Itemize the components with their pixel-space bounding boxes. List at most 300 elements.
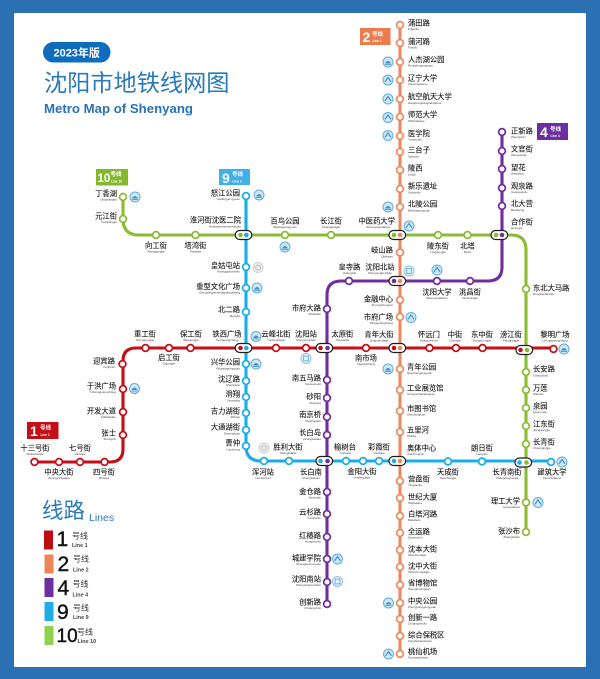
station: 云杉路: Yunshanlu	[307, 516, 321, 520]
station: 天成街: 天成街	[437, 468, 459, 476]
station: 皇寺路: Huangsilu	[343, 271, 357, 275]
station: 长白南: Changbainan	[302, 476, 320, 480]
station: 南市场: Nanshichang	[357, 362, 375, 366]
station: 长青南街: 长青南街	[492, 468, 522, 476]
legend: line 1: Line 1	[72, 543, 88, 549]
station: 工业展览馆: Gongyezhanlanguan	[407, 392, 435, 396]
legend: line 2: 号线	[73, 554, 89, 564]
station: 蒲田路: Putianlu	[408, 27, 419, 31]
station: 师范大学	[397, 110, 437, 123]
station: 理工大学: Ligongdaxue	[503, 505, 520, 509]
station: 长青南街: Changqingnanjie	[496, 476, 519, 480]
station: 全运路: 全运路	[408, 527, 431, 536]
legend: line 10: 号线	[77, 626, 93, 636]
station: 张士: Zhangshi	[104, 437, 116, 441]
station: 张士	[101, 428, 126, 441]
station: 太原街: Taiyuanjie	[336, 338, 350, 342]
station: 于洪广场	[87, 382, 126, 394]
station: 南京桥	[299, 410, 330, 423]
station: 东北大马路: Dongbeidamalu	[533, 292, 554, 296]
station: 观泉路: 观泉路	[511, 182, 534, 190]
station: 沈辽路	[218, 374, 249, 387]
interchange: 长青南街	[515, 458, 532, 467]
station: 吉力湖街: 吉力湖街	[211, 406, 240, 416]
station: 师范大学: Shifandaxue	[408, 119, 425, 123]
station: 建筑大学	[537, 459, 567, 480]
station: 正新路: Zhengxinlu	[511, 135, 526, 139]
station: 北塔: 北塔	[460, 242, 475, 250]
station: 洮昌街: Taochangjie	[462, 296, 478, 300]
legend: line 1: 号线	[72, 530, 88, 540]
icon: 中央公园	[384, 598, 394, 608]
station: 省博物馆: Shengbowuguan	[408, 587, 431, 591]
station: 迎宾路	[93, 356, 126, 369]
icon: 医学院	[383, 130, 393, 140]
station: 沈阳大学: Shenyangdaxue	[426, 296, 448, 300]
station: 元江街: Yuanjiangjie	[101, 220, 117, 224]
station: 世纪大厦	[397, 492, 437, 505]
icon: 铁西广场	[251, 332, 261, 342]
legend: line 4: 号线	[72, 578, 88, 588]
icon: 沈阳大学	[432, 265, 442, 275]
legend: line 10	[44, 626, 96, 647]
station: 长安路: Chang'anlu	[533, 374, 548, 378]
icon: 沈阳北站	[404, 266, 414, 276]
station: 泉园: 泉园	[533, 402, 548, 410]
station: 滂江街: 滂江街	[500, 330, 522, 339]
station: 大通湖街: Datonghujie	[224, 432, 240, 436]
legend: line 10: Line 10	[78, 639, 96, 645]
station: 保工街	[180, 330, 202, 351]
station: 七号街: Qihaojie	[74, 452, 86, 456]
station: 开发大道: 开发大道	[87, 406, 117, 416]
line 4 badge: 号线	[550, 125, 562, 133]
station: 青年大街: Qingniandajie	[370, 338, 388, 342]
station: 三台子: Santaizi	[408, 154, 419, 158]
station: 张沙布: 张沙布	[498, 526, 520, 536]
icon: 城建学院	[332, 554, 342, 564]
station: 怒江公园: Nujianggongyuan	[217, 197, 240, 201]
station: 黎明广场	[540, 330, 570, 352]
station: 东中街	[471, 330, 493, 351]
station: 长白岛: 长白岛	[299, 428, 321, 437]
station: 蒲河路: Puhelu	[408, 46, 418, 50]
station: 人杰湖公园: 人杰湖公园	[408, 55, 444, 64]
station: 胜利大街	[273, 442, 303, 464]
line 1 route	[34, 348, 553, 462]
station: 桃仙机场: 桃仙机场	[408, 647, 437, 656]
station: 创新一路: Chuangxinyilu	[408, 622, 427, 626]
line 4 route	[327, 132, 502, 604]
station: 万莲: 万莲	[533, 384, 548, 392]
station: 合作街: Hezuojie	[511, 226, 523, 230]
station: 张沙布	[498, 526, 529, 539]
station: 沈阳站: Shenyangzhan	[296, 338, 316, 342]
station: 重型文化广场	[196, 282, 249, 294]
station: 天成街: Tianchengjie	[440, 476, 457, 480]
station: 大通湖街	[211, 422, 249, 436]
station: 兴华公园: 兴华公园	[211, 358, 240, 366]
legend	[42, 499, 114, 647]
station: 全运路: Quanyunlu	[408, 536, 423, 540]
station: 正新路: 正新路	[511, 126, 534, 136]
station: 重工街	[134, 330, 156, 351]
station: 滑翔	[225, 390, 249, 402]
station: 怀远门: Huaiyuanmen	[420, 338, 439, 342]
icon: 建筑大学	[557, 457, 567, 467]
line 10 badge: 号线	[110, 170, 122, 178]
station: 市府广场: Shifuguangchang	[370, 321, 393, 325]
station: 铁西广场: Tiexiguangchang	[216, 338, 239, 342]
subtitle: Metro Map of Shenyang	[44, 101, 193, 116]
station: 曹仲	[225, 438, 249, 452]
station: 市府广场: 市府广场	[364, 312, 393, 322]
station: 金阳大街: 金阳大街	[347, 467, 377, 476]
station: 铁西广场: 铁西广场	[212, 330, 242, 338]
line 9 badge: Line 9	[232, 180, 242, 184]
station: 医学院: 医学院	[408, 129, 431, 138]
station: 塔湾街: 塔湾街	[185, 241, 206, 250]
legend: line 2: 2	[58, 553, 69, 576]
station: 百鸟公园: 百鸟公园	[270, 216, 300, 226]
icon: 重型文化广场	[252, 283, 262, 293]
station: 中医药大学: Zhongyiyaodaxue	[366, 225, 390, 229]
station: 泉园	[523, 402, 548, 414]
station: 北陵公园: 北陵公园	[408, 200, 437, 208]
line 9 route	[246, 197, 551, 461]
station: 重工街: Zhonggongjie	[136, 338, 154, 342]
station: 沈阳站: 沈阳站	[295, 330, 317, 338]
station: 北塔: Beita	[464, 250, 471, 254]
station: 工业展览馆: 工业展览馆	[407, 384, 443, 392]
station: 榆树台	[334, 442, 356, 464]
station: 市府大路: Shifudalu	[308, 312, 321, 316]
station: 南京桥: Nanjingqiao	[305, 419, 321, 423]
station: 望花	[499, 163, 526, 176]
station: 综合保税区: Zonghebaoshuiqu	[408, 639, 432, 643]
station: 市府广场	[364, 312, 403, 325]
interchange: 沈阳北站	[389, 276, 406, 286]
station: 北二路	[218, 305, 249, 318]
station: 北大营: Beidaying	[511, 208, 525, 212]
line 1 badge	[27, 422, 58, 439]
station: 沈中大街: 沈中大街	[408, 562, 437, 570]
station: 红椿路	[299, 531, 330, 544]
station: 蒲河路	[397, 37, 431, 50]
station: 黎明广场: Limingguangchang	[542, 338, 568, 342]
interchange: 青年大街	[389, 344, 406, 352]
icon: 百鸟公园	[280, 242, 290, 252]
station: 皇寺路	[339, 262, 361, 284]
legend: line 9: Line 9	[73, 615, 89, 621]
legend: line 1	[44, 528, 88, 551]
station: 红椿路: 红椿路	[299, 531, 322, 540]
station: 丁香湖: Dingxianghu	[100, 198, 117, 202]
line 1 badge: 1	[30, 423, 38, 439]
station: 南京桥: 南京桥	[299, 410, 322, 419]
station: 中街: Zhongjie	[449, 338, 461, 342]
station: 东北大马路	[523, 284, 570, 296]
station: 沈中大街	[397, 562, 437, 574]
station: 望花: 望花	[511, 163, 526, 172]
station: 云峰北街: Yunfengbeijie	[267, 338, 285, 342]
station: 蒲河路: 蒲河路	[408, 37, 431, 46]
station: 胜利大街: Shenglidajie	[280, 451, 296, 455]
station: 沈本大街: 沈本大街	[408, 544, 437, 554]
station: 创新一路: 创新一路	[408, 613, 438, 622]
legend: line 4: 4	[58, 577, 70, 600]
station: 航空航天大学: 航空航天大学	[408, 92, 452, 101]
line 9 badge	[219, 169, 250, 186]
station: 十三号街: Shisanhaojie	[26, 452, 44, 456]
line 2 badge: Line 2	[372, 39, 382, 43]
station: 云峰北街: 云峰北街	[261, 330, 291, 338]
interchange: 中医药大学	[389, 230, 406, 240]
station: 沈本大街	[397, 544, 437, 557]
station: 观泉路	[499, 182, 534, 194]
station: 奥体中心: Aotizhongxin	[407, 452, 425, 456]
station: 云杉路: 云杉路	[299, 508, 322, 516]
station: 沈辽路: 沈辽路	[218, 374, 241, 384]
line 1 stations	[20, 330, 570, 480]
station: 东中街: 东中街	[471, 330, 493, 339]
station: 创新路	[299, 598, 330, 610]
station: 长青街: Changqingjie	[533, 446, 551, 450]
station: 建筑大学: 建筑大学	[537, 468, 567, 476]
station: 淮河街沈医二院: Huaihejieshenyierbyuan	[209, 224, 241, 228]
line 9 stations	[196, 188, 567, 480]
station: 塔湾街	[185, 232, 206, 254]
station: 理工大学	[491, 496, 529, 509]
icon: 曹仲	[259, 443, 269, 453]
line 2 route	[398, 25, 402, 654]
line 10 badge: Line 10	[111, 180, 122, 184]
station: 世纪大厦: 世纪大厦	[408, 492, 437, 502]
station: 长白岛	[299, 428, 330, 441]
station: 中街: 中街	[448, 330, 462, 339]
station: 红椿路: Hongchunlu	[305, 540, 321, 544]
station: 陵西: 陵西	[408, 164, 423, 172]
station: 营盘街	[397, 474, 430, 487]
station: 辽宁大学: Liaoningdaxue	[408, 82, 428, 86]
legend: line 2	[44, 553, 89, 576]
station: 奥体中心: 奥体中心	[407, 444, 437, 452]
station: 金融中心	[364, 294, 403, 307]
station: 江东街: 江东街	[533, 420, 555, 428]
station: 市图书馆: Shitushuguan	[407, 412, 426, 416]
station: 江东街	[523, 420, 555, 432]
station: 向工街: 向工街	[145, 241, 167, 250]
line 4 badge: 4	[540, 124, 548, 140]
station: 滂江街: Pangjiangjie	[503, 338, 519, 342]
station: 保工街: 保工街	[180, 330, 202, 338]
station: 岐山路: Qishanlu	[381, 254, 393, 258]
station: 省博物馆	[397, 578, 437, 591]
station: 沈阳南站: Shenyangnanzhan	[296, 583, 321, 587]
station: 青年公园: Qingniangongyuan	[407, 371, 433, 375]
interchange: 滂江街	[516, 346, 533, 354]
station: 重型文化广场: Zhongxingwenhuaguangchang	[199, 290, 240, 294]
station: 张士: 张士	[101, 428, 116, 438]
station: 建筑大学: Jianzhudaxue	[543, 476, 562, 480]
station: 望花: Wanghua	[511, 172, 524, 176]
station: 四号街: Sihaojie	[99, 476, 110, 480]
station: 中央公园: Zhongyanggongyuan	[408, 605, 437, 609]
station: 向工街: Xianggongjie	[147, 250, 165, 254]
station: 七号街: 七号街	[69, 444, 91, 452]
station: 金仓路	[299, 487, 330, 500]
station: 创新一路	[397, 613, 438, 626]
station: 于洪广场: Yuhongguangchang	[89, 390, 116, 394]
station: 榆树台: Yushutai	[339, 451, 351, 455]
station: 工业展览馆	[397, 384, 443, 396]
legend: line 2: Line 2	[73, 568, 89, 574]
station: 新乐遗址: 新乐遗址	[408, 182, 438, 190]
station: 市府大路	[292, 304, 330, 316]
station: 沈阳大学: 沈阳大学	[422, 288, 452, 296]
legend: line 4	[44, 577, 88, 600]
interchange markers	[235, 230, 533, 467]
station: 皇姑屯站: 皇姑屯站	[211, 261, 240, 270]
legend: line 4: Line 4	[72, 592, 88, 598]
station: 北二路: 北二路	[218, 305, 241, 314]
station: 元江街	[95, 212, 126, 224]
station: 吉力湖街: Jilihujie	[230, 415, 240, 419]
line 2 stations	[364, 18, 452, 660]
station: 万莲	[523, 384, 548, 396]
legend heading: Lines	[89, 512, 114, 524]
station: 综合保税区	[397, 630, 444, 643]
station: 兴华公园	[211, 358, 249, 370]
station: 长白岛: Changbaidao	[303, 437, 321, 441]
station: 营盘街: 营盘街	[408, 474, 430, 484]
station: 陵东街: 陵东街	[427, 242, 449, 250]
station: 砂阳	[306, 392, 330, 405]
station: 长青街	[523, 438, 555, 450]
station: 重型文化广场: 重型文化广场	[196, 282, 240, 291]
station: 桃仙机场: Taoxianjichang	[408, 656, 428, 660]
station: 三台子	[397, 146, 430, 158]
line 1 badge: Line 1	[40, 433, 50, 437]
station: 陵西: Lingxi	[408, 172, 416, 176]
station: 浑河站	[252, 458, 274, 480]
interchange: 长白南	[316, 456, 333, 466]
station: 七号街	[69, 444, 91, 465]
station: 综合保税区: 综合保税区	[408, 630, 444, 640]
station: 城建学院: 城建学院	[292, 554, 322, 562]
station: 文官街	[499, 144, 533, 157]
icon: 青年公园	[383, 364, 393, 374]
station: 重工街: 重工街	[134, 330, 156, 338]
station: 浑河站: 浑河站	[252, 468, 274, 476]
legend: line 1: 1	[56, 528, 68, 551]
icon: 航空航天大学	[383, 94, 393, 104]
station: 青年大街: 青年大街	[364, 330, 394, 339]
station: 新乐遗址: Xinleyizhi	[408, 190, 421, 194]
station: 正新路	[499, 126, 534, 139]
station: 云杉路	[299, 508, 330, 520]
station: 保工街: Baogongjie	[183, 338, 199, 342]
station: 胜利大街: 胜利大街	[273, 442, 303, 452]
station: 泉园: Quanyuan	[533, 410, 547, 414]
icon: 人杰湖公园	[383, 57, 393, 67]
legend heading	[42, 499, 114, 524]
station: 东北大马路: 东北大马路	[533, 284, 570, 292]
station: 五里河: Wulihe	[407, 434, 416, 438]
station: 金融中心: 金融中心	[364, 294, 394, 304]
icon: 辽宁大学	[383, 75, 393, 85]
station: 开发大道: Kaifadadao	[101, 415, 116, 419]
station: 洮昌街: 洮昌街	[459, 288, 481, 296]
station: 医学院: Yixueyuan	[408, 138, 422, 142]
station: 彩霞街: 彩霞街	[368, 442, 390, 452]
station: 航空航天大学	[397, 92, 452, 105]
transfer icons	[130, 57, 569, 659]
icon: 沈阳站	[301, 354, 311, 364]
station: 中央大街	[44, 459, 74, 480]
station: 沈辽路: Shenliaolu	[226, 383, 240, 387]
edition badge: 2023年版	[53, 46, 100, 60]
station: 怀远门: 怀远门	[418, 330, 440, 339]
station: 大通湖街: 大通湖街	[211, 422, 240, 432]
station: 四号街: 四号街	[93, 468, 115, 476]
station: 市府大路: 市府大路	[292, 304, 322, 312]
station: 中央公园	[397, 596, 437, 609]
station: 怀远门	[418, 330, 440, 351]
station: 丁香湖: 丁香湖	[95, 189, 117, 198]
station: 五里河: 五里河	[407, 426, 430, 434]
station: 彩霞街	[368, 442, 390, 464]
station: 北大营: 北大营	[511, 199, 533, 208]
station: 辽宁大学	[397, 74, 437, 86]
station: 开发大道	[87, 406, 126, 419]
station: 南五马路: Nanwumalu	[305, 382, 321, 386]
station: 北塔	[460, 232, 475, 254]
line 4 stations	[292, 126, 534, 610]
station: 浑河站: Hunhezhan	[255, 476, 271, 480]
station: 皇姑屯站: Huanggutunzhan	[217, 270, 240, 274]
interchange: 太原街	[316, 344, 333, 352]
station: 医学院	[397, 129, 431, 142]
station: 启工街: 启工街	[158, 353, 180, 362]
station: 市图书馆: 市图书馆	[407, 404, 436, 413]
icon: 沈阳南站	[332, 576, 342, 586]
station: 塔湾街: Tawanjie	[190, 250, 202, 254]
legend heading: 线路	[42, 499, 85, 523]
icon: 于洪广场	[130, 384, 140, 394]
station: 城建学院	[292, 554, 330, 566]
station: 太原街: 太原街	[332, 330, 353, 338]
station: 桃仙机场	[397, 647, 437, 660]
icon: 北陵公园	[383, 202, 393, 212]
icon: 皇姑屯站	[253, 262, 263, 272]
station: 怒江公园	[211, 188, 249, 201]
station: 长白南: 长白南	[300, 468, 322, 476]
interchange: 奥体中心	[389, 456, 406, 466]
station: 百鸟公园	[270, 216, 300, 238]
icon: 桃仙机场	[384, 649, 394, 659]
station: 中街	[448, 330, 462, 351]
station: 朗日街: 朗日街	[471, 444, 493, 452]
station: 长江街: 长江街	[320, 216, 342, 226]
station: 沈中大街: Shenzhongdajie	[408, 570, 430, 574]
station: 滑翔: Huaxiang	[227, 398, 240, 402]
legend: line 9	[44, 601, 89, 624]
station: 城建学院: Chengjianxueyuan	[296, 562, 321, 566]
station: 启工街: Qigongjie	[163, 362, 176, 366]
legend: line 9: 9	[57, 601, 69, 624]
title: 沈阳市地铁线网图	[44, 70, 230, 96]
